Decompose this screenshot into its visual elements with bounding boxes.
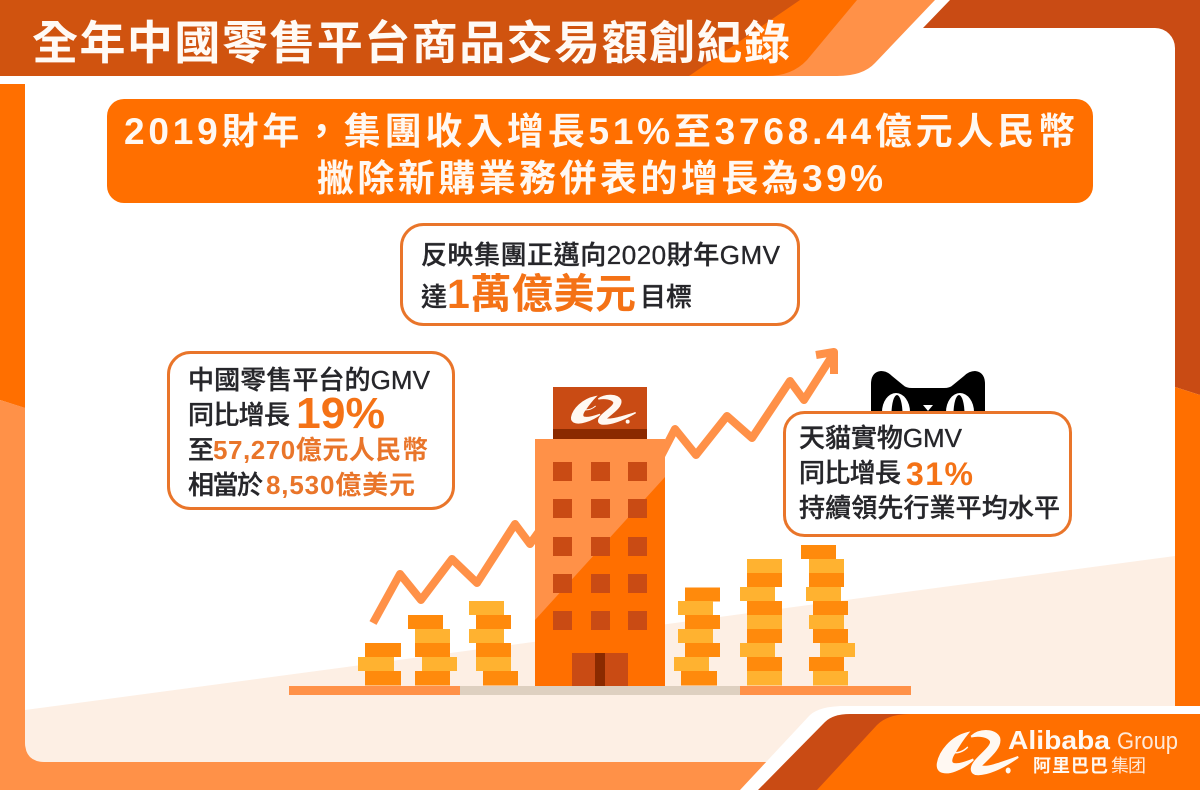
line 2 with 19%: 同比增長 [188, 400, 290, 430]
icon: Tmall cat [871, 371, 985, 433]
line 2 with 31% [799, 456, 973, 492]
banner line 2: 撇除新購業務併表的增長為39% [317, 158, 883, 199]
line 2 with 31%: 同比增長 [799, 458, 901, 488]
callout line 1: 反映集團正邁向2020財年GMV [421, 240, 781, 270]
wordmark [1008, 725, 1178, 755]
windows [553, 462, 647, 630]
coin stacks left [358, 601, 518, 686]
line 1: 天貓實物GMV [799, 423, 963, 453]
line 3: 至 [188, 435, 214, 465]
footer logo: Alibaba Group [938, 725, 1178, 776]
Chinese wordmark: 阿里巴巴 [1033, 756, 1108, 776]
callout: China retail GMV [168, 352, 454, 508]
callout line 2 [421, 271, 692, 317]
wordmark: Alibaba [1008, 725, 1111, 755]
line 1: 中國零售平台的GMV [188, 365, 431, 395]
Chinese wordmark [1033, 756, 1146, 776]
header ribbon [0, 0, 935, 76]
line 4 [188, 470, 415, 500]
rising line arrow left [373, 524, 540, 623]
ground line [289, 686, 911, 695]
rising line arrow right [660, 352, 834, 458]
building [535, 387, 665, 686]
callout line 2: 目標 [640, 282, 692, 312]
line 2 with 31%: 31% [906, 456, 973, 492]
footer ribbon [740, 706, 1200, 790]
icon: logo mark [938, 731, 1018, 774]
callout: Tmall GMV [784, 412, 1070, 536]
icon: logo on building sign [572, 395, 636, 424]
line 4: 8,530億美元 [266, 470, 415, 500]
line 3: 持續領先行業平均水平 [799, 493, 1060, 523]
title: 全年中國零售平台商品交易額創紀錄 [32, 17, 790, 69]
callout line 2: 達 [421, 282, 447, 312]
line 4: 相當於 [188, 470, 263, 500]
banner line 1: 2019財年，集團收入增長51%至3768.44億元人民幣 [124, 111, 1075, 152]
door [572, 653, 628, 686]
Chinese wordmark: 集团 [1111, 756, 1146, 776]
callout line 2: 1萬億美元 [447, 271, 636, 317]
callout: 2020 GMV target [402, 224, 798, 324]
line 2 with 19% [188, 389, 385, 438]
banner: revenue [107, 99, 1093, 203]
line 2 with 19%: 19% [296, 389, 385, 438]
coin stacks right [674, 545, 855, 686]
line 3: 57,270億元人民幣 [213, 435, 428, 465]
wordmark: Group [1117, 728, 1178, 755]
